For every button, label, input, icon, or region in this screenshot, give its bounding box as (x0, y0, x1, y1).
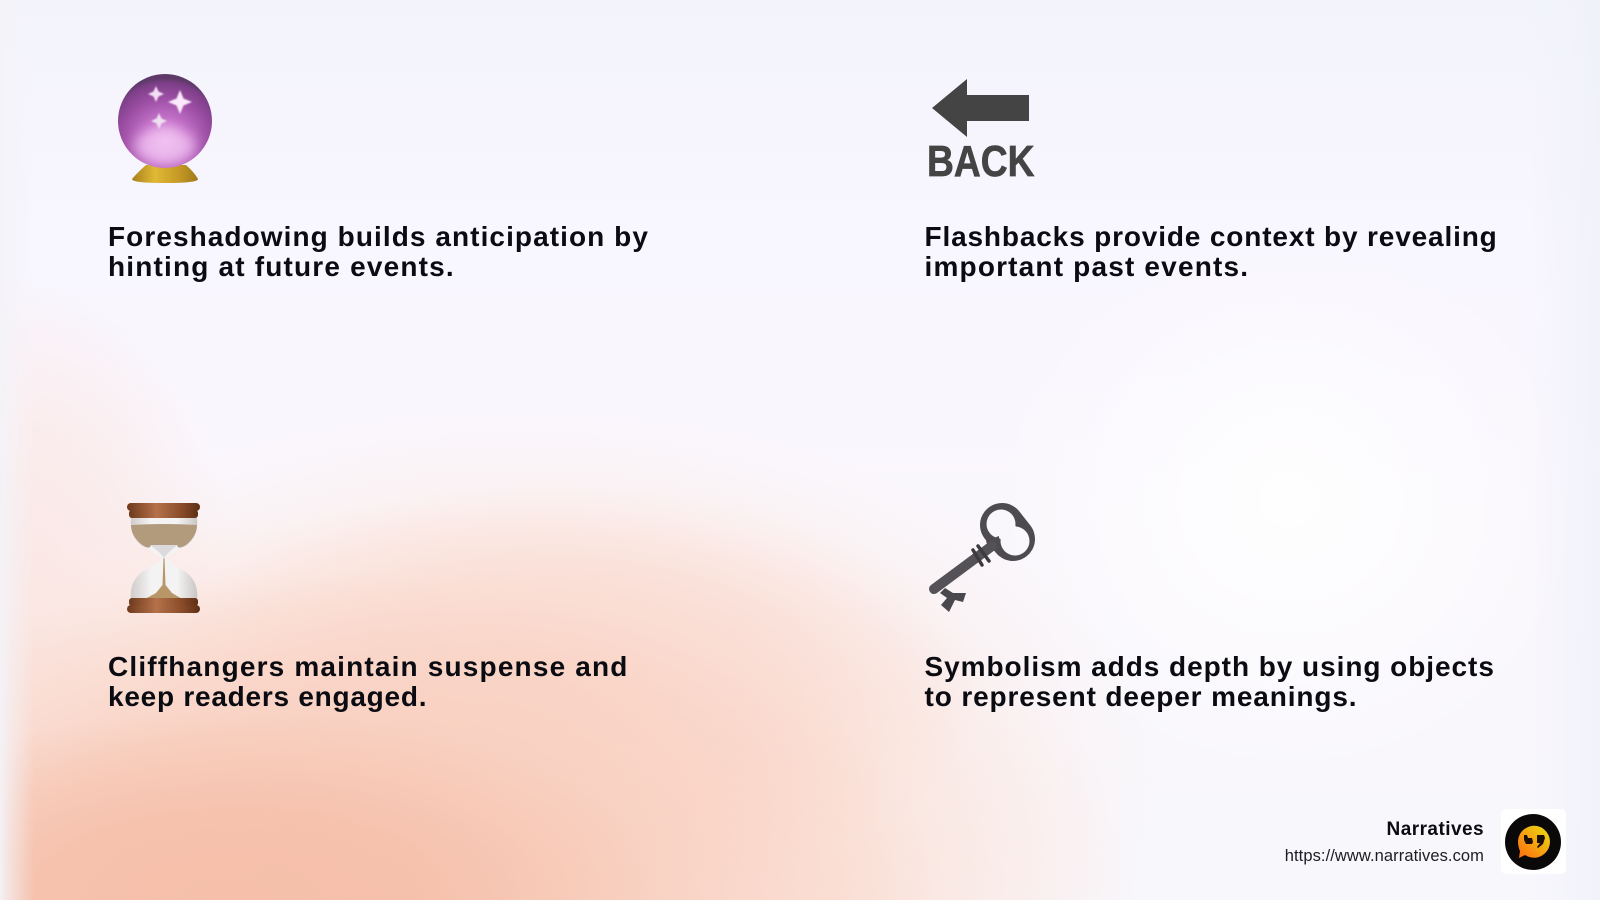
arrow shape (932, 79, 1029, 137)
heading: foreshadowing: hinting at future events. (108, 251, 455, 282)
brand name: Narratives (1387, 819, 1484, 840)
heading: symbolism: to represent deeper meanings. (924, 681, 1357, 712)
heading: foreshadowing (108, 221, 649, 282)
heading: cliffhangers: keep readers engaged. (108, 681, 427, 712)
logo (1505, 809, 1566, 874)
heading: symbolism: Symbolism adds depth by using objects (924, 651, 1495, 682)
heading: cliffhangers: Cliffhangers maintain suspense and (108, 651, 629, 682)
heading: cliffhangers (108, 651, 629, 712)
heading: foreshadowing: Foreshadowing builds anticipation by (108, 221, 649, 252)
icon: old key (929, 503, 1035, 612)
heading: flashbacks: important past events. (924, 251, 1249, 282)
heading: flashbacks (924, 221, 1498, 282)
icon: back arrow (927, 79, 1035, 185)
heading: flashbacks: Flashbacks provide context by revealing (924, 221, 1498, 252)
brand block (1285, 809, 1566, 874)
heading: symbolism (924, 651, 1495, 712)
icon: hourglass (127, 503, 200, 613)
brand url: https://www.narratives.com (1285, 847, 1484, 865)
icon: crystal ball (118, 74, 212, 183)
